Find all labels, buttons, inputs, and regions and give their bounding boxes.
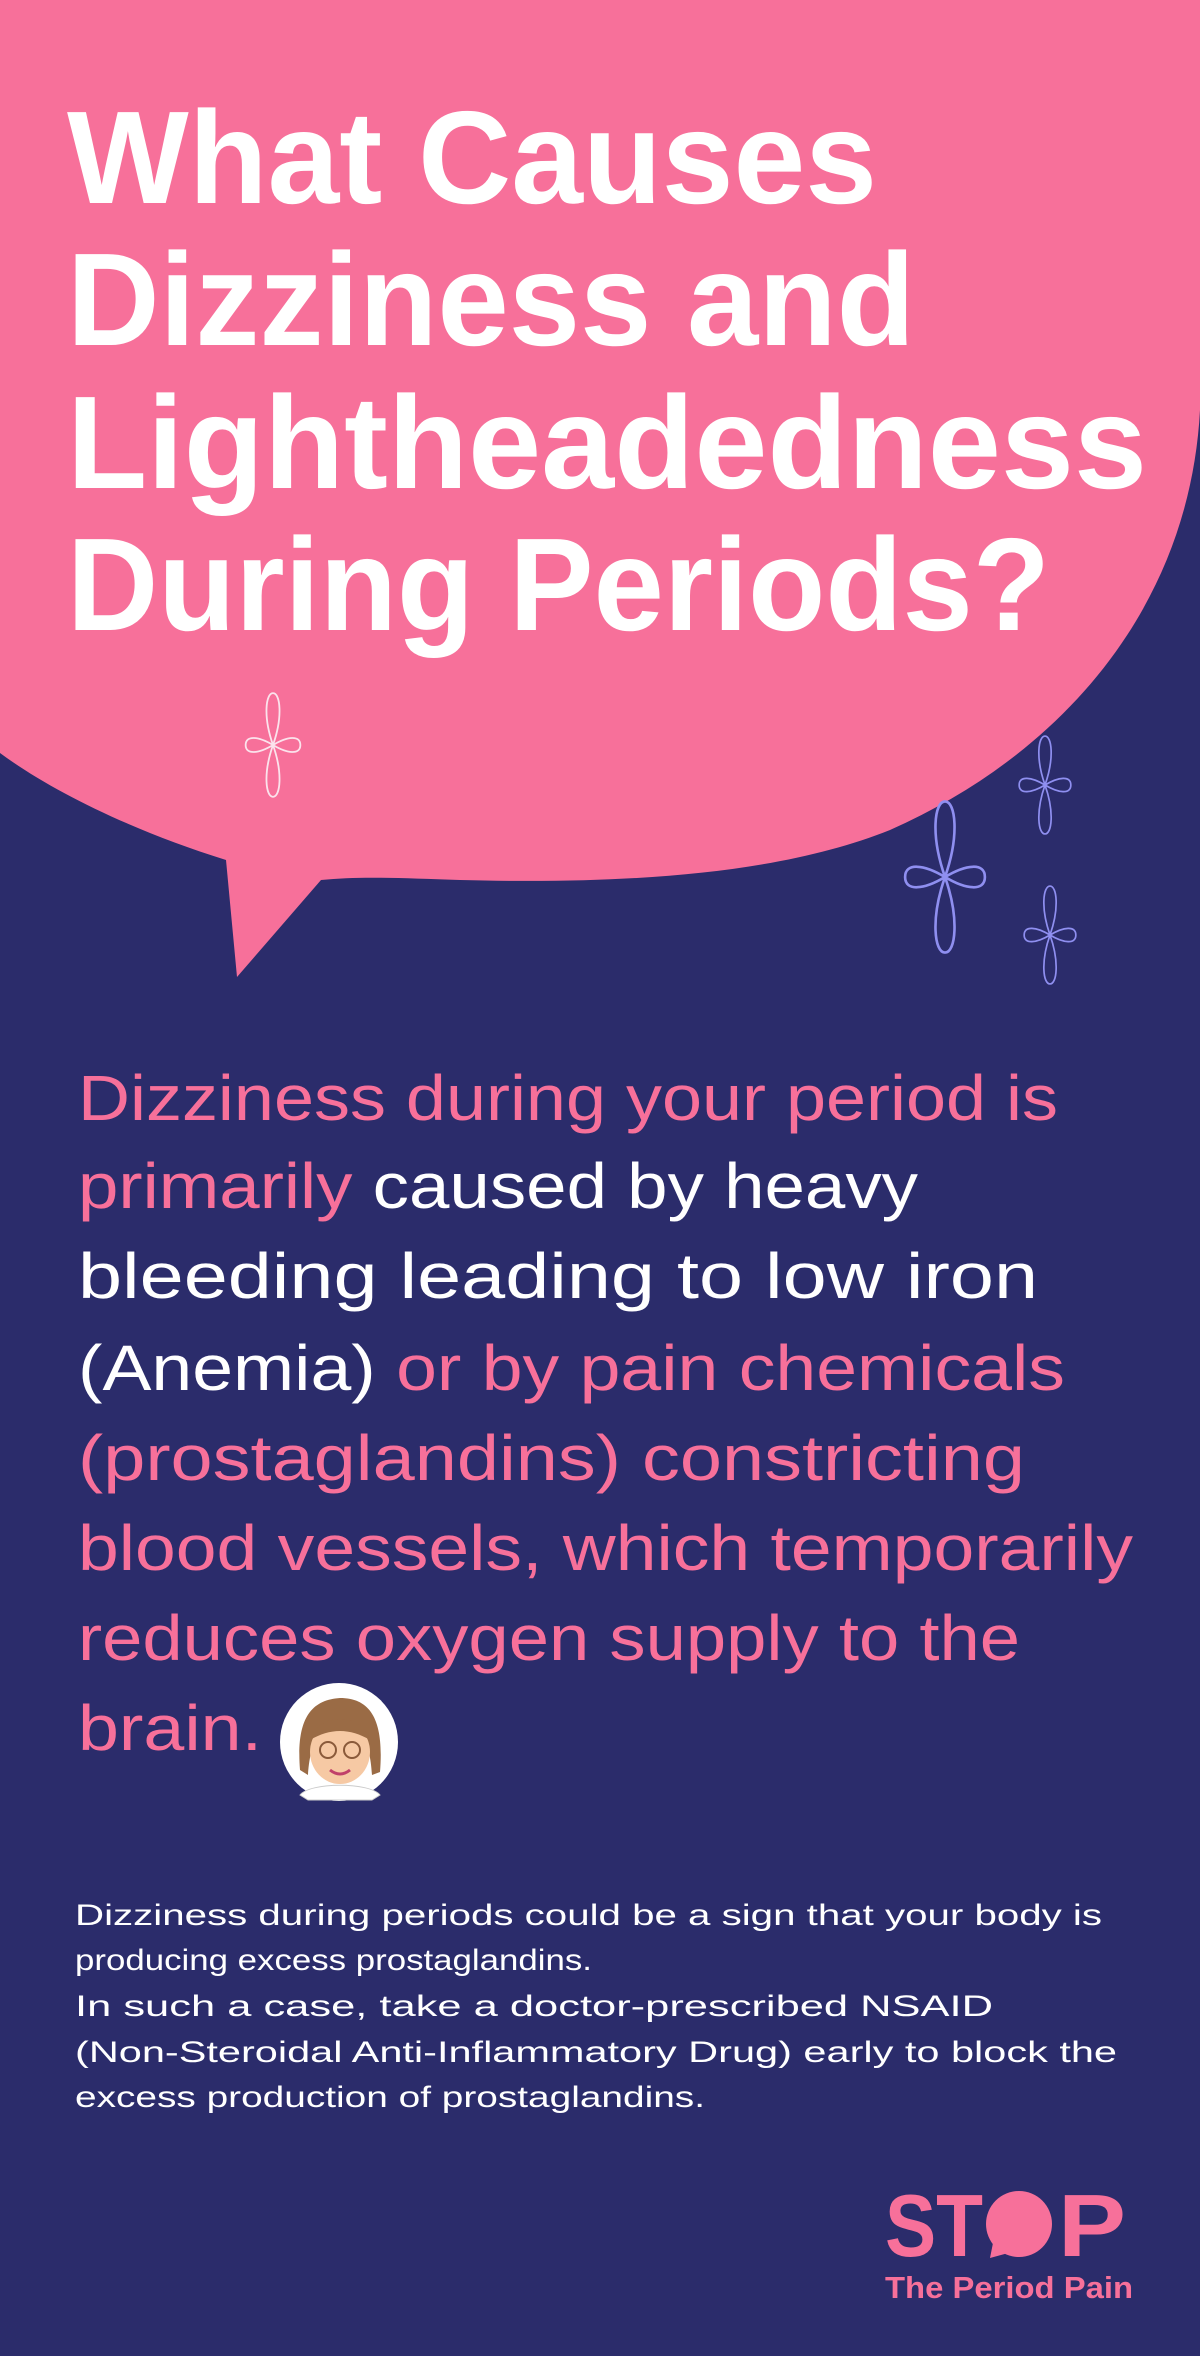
speech bubble [0, 0, 1200, 977]
main text: (Anemia) or by pain chemicals [78, 1332, 1065, 1404]
note text: In such a case, take a doctor-prescribed NSAID [75, 1990, 993, 2023]
logo: P [1058, 2176, 1126, 2275]
main text: Dizziness during your period is [78, 1062, 1058, 1134]
note text: producing excess prostaglandins. [75, 1944, 592, 1977]
icon: speech bubble O [986, 2191, 1052, 2258]
title [67, 84, 1147, 658]
main text [78, 1062, 1133, 1764]
note text: Dizziness during periods could be a sign that your body is [75, 1899, 1102, 1932]
note text: (Non-Steroidal Anti-Inflammatory Drug) early to block the [75, 2036, 1117, 2069]
title: Dizziness and [67, 226, 915, 373]
main text: reduces oxygen supply to the [78, 1602, 1020, 1674]
title: What Causes [67, 84, 877, 231]
main text: (prostaglandins) constricting [78, 1422, 1025, 1494]
note text: excess production of prostaglandins. [75, 2081, 705, 2114]
main text: blood vessels, which temporarily [78, 1512, 1133, 1584]
logo: ST [885, 2176, 983, 2275]
main text: primarily caused by heavy [78, 1150, 918, 1222]
icon: sparkle pink [246, 693, 300, 797]
note text [75, 1899, 1117, 2114]
main text: brain. [78, 1692, 262, 1764]
title: Lightheadedness [67, 369, 1147, 516]
icon: doctor avatar [280, 1683, 398, 1801]
title: During Periods? [67, 511, 1050, 658]
logo: The Period Pain [885, 2270, 1133, 2305]
main text: bleeding leading to low iron [78, 1240, 1038, 1312]
icon: sparkles blue [905, 736, 1076, 984]
logo [885, 2176, 1133, 2305]
